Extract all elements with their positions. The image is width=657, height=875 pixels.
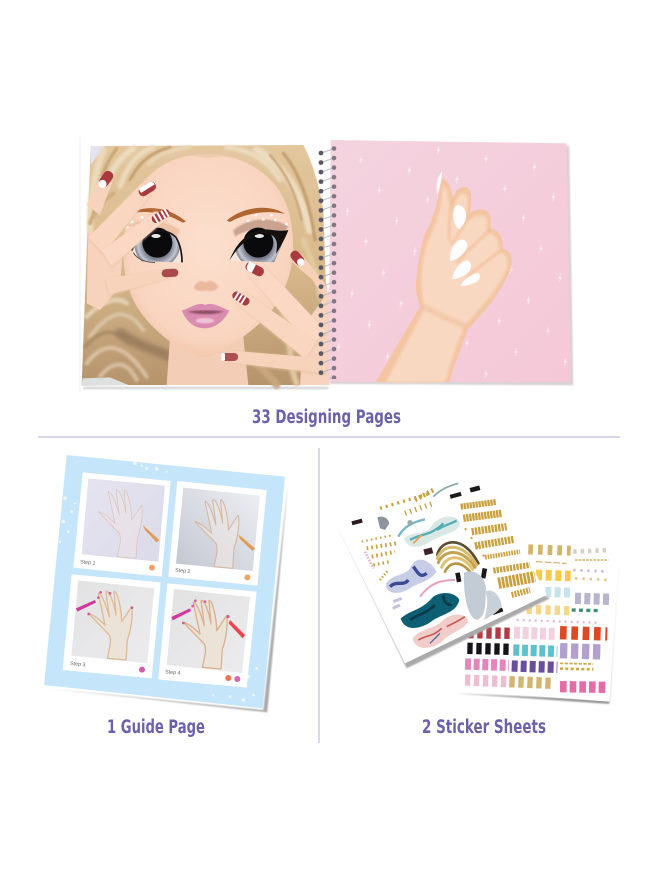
card: step 3: Step 3 — [70, 661, 86, 668]
white nails — [437, 172, 480, 286]
card: step 3 — [63, 574, 161, 678]
right page: pink hand page — [328, 140, 573, 385]
card: step 4: Step 4 — [165, 669, 181, 677]
eyebrows — [130, 208, 186, 223]
back sticker sheet — [453, 543, 620, 704]
neck — [167, 337, 248, 385]
card: step 2 — [168, 481, 267, 586]
nose — [194, 281, 218, 291]
face — [123, 154, 293, 357]
card: step 4 — [158, 583, 257, 688]
front sticker sheet — [337, 477, 550, 668]
panel: guide page — [44, 455, 288, 712]
gold bangles — [437, 542, 478, 572]
hair streaks — [85, 147, 320, 385]
red nails — [96, 169, 307, 361]
eyeshadow gems — [126, 214, 288, 229]
vertical divider — [318, 448, 320, 743]
horizontal divider — [38, 436, 620, 438]
marble scrunchie: teal — [404, 516, 460, 547]
nail rows — [465, 549, 611, 687]
eye right — [230, 228, 288, 262]
heading: 2 Sticker Sheets: 2 Sticker Sheets — [422, 717, 546, 738]
small gold charms — [362, 490, 487, 580]
card: step 1: Step 1 — [80, 559, 96, 567]
heading: 33 Designing Pages: 33 Designing Pages — [252, 407, 401, 428]
marble scrunchie: pink — [413, 615, 468, 648]
left hand — [87, 176, 175, 310]
panel: sticker sheets — [337, 477, 620, 704]
white bolts — [337, 147, 567, 378]
velvet scrunchie — [401, 593, 459, 628]
marble scrunchie: navy — [386, 560, 437, 593]
eye left — [131, 228, 183, 264]
card: step 2: Step 2 — [175, 568, 191, 575]
illustrated hand — [376, 178, 512, 382]
splatter — [59, 462, 258, 702]
card: step 1 — [73, 472, 171, 577]
gold borders — [461, 502, 535, 595]
right hand — [227, 255, 329, 385]
silver wings — [464, 571, 486, 620]
left page: face illustration — [82, 145, 329, 389]
spiral binding — [317, 146, 339, 379]
heading: 1 Guide Page: 1 Guide Page — [107, 717, 205, 738]
lips — [182, 304, 229, 328]
panel: open spiral book — [80, 137, 573, 392]
